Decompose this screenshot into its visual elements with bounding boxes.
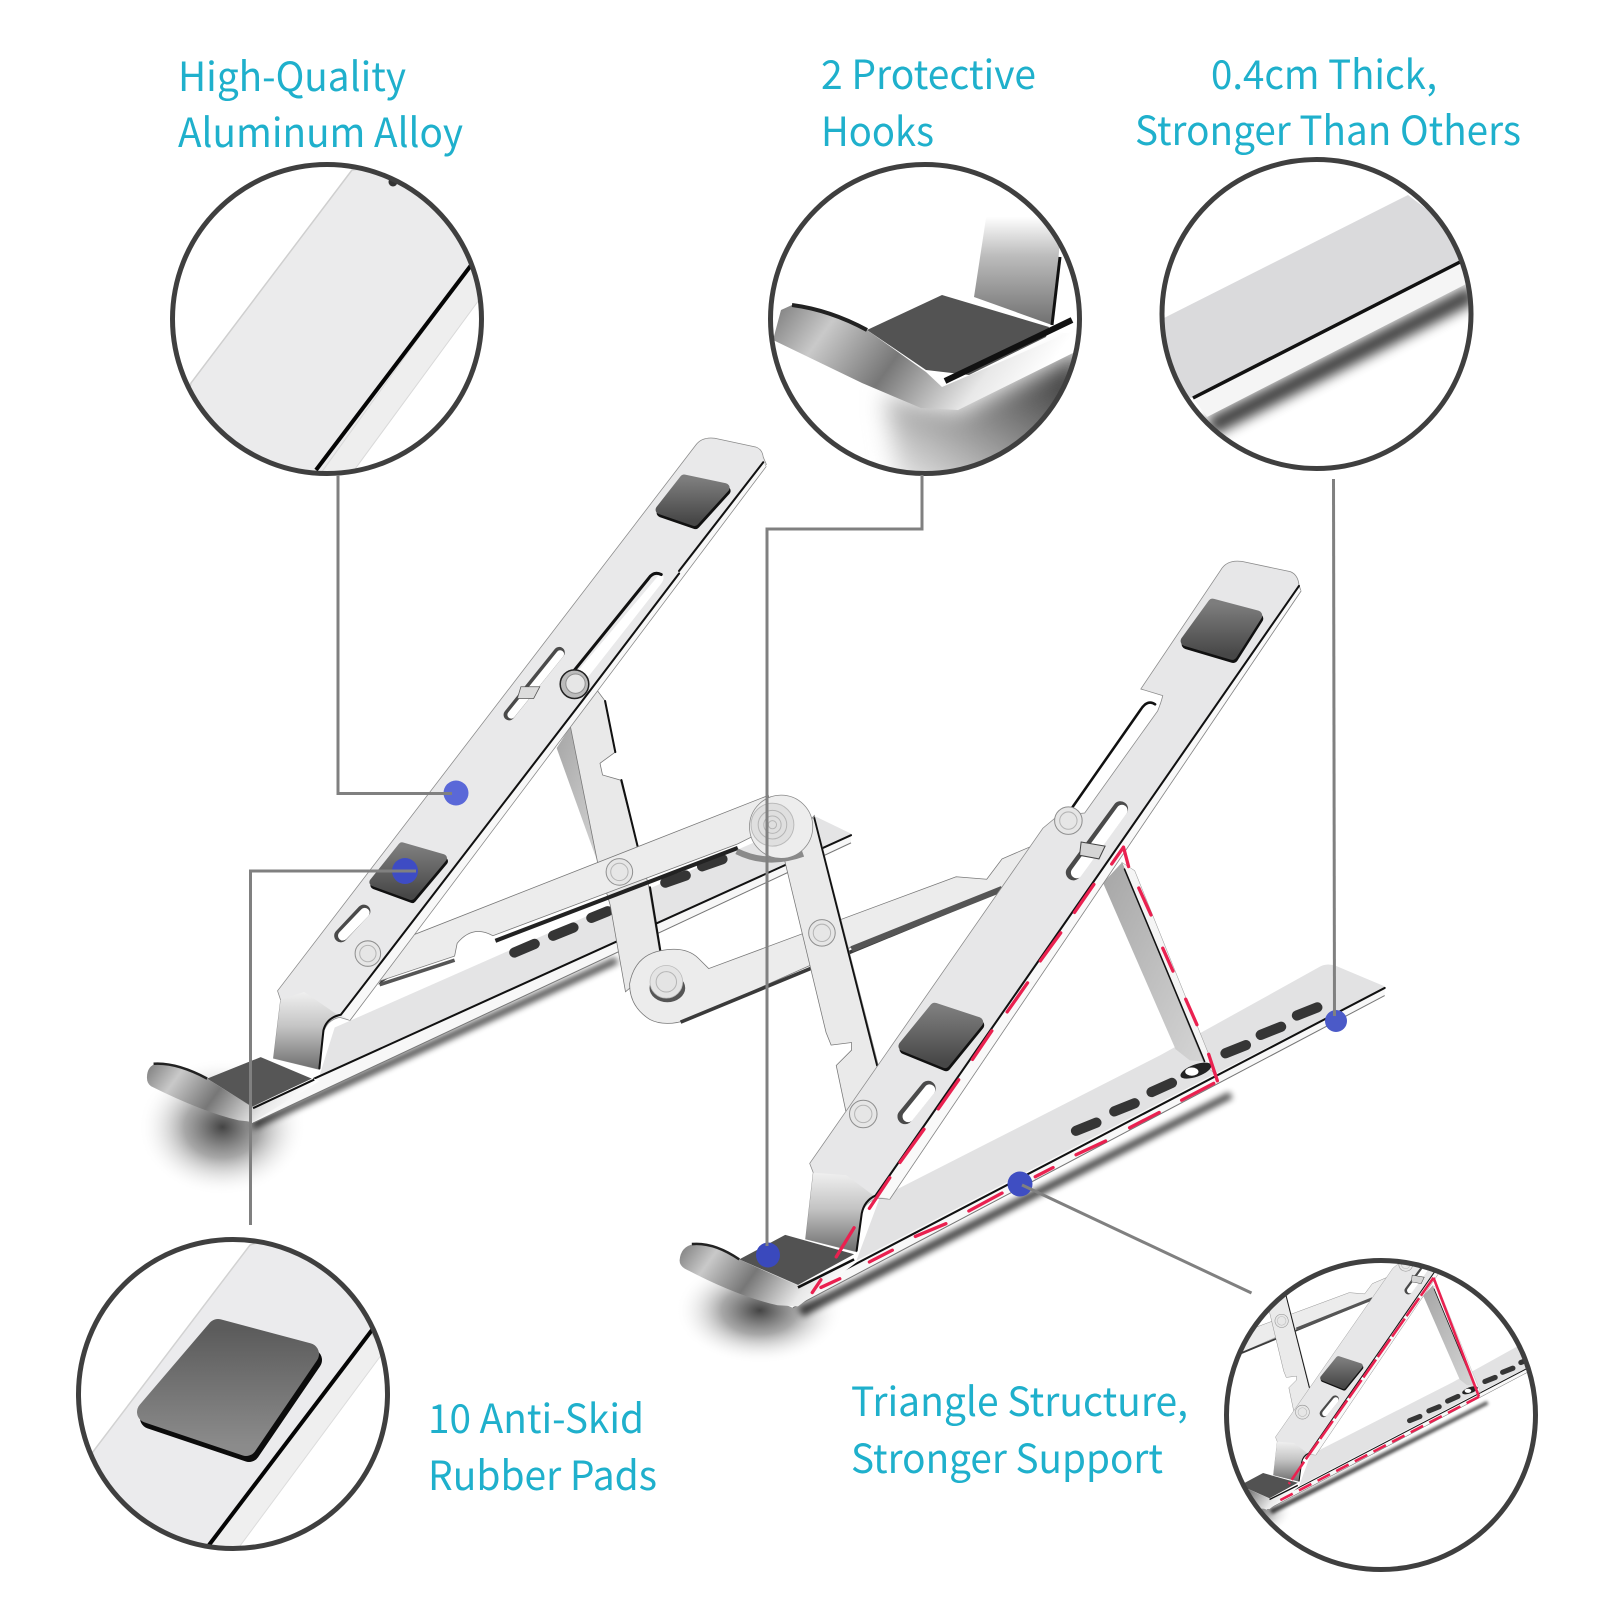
red triangle marking	[812, 847, 1217, 1293]
front arm rubber pads	[1187, 607, 1258, 658]
front top arm	[680, 561, 1301, 1306]
thick plate top	[1160, 195, 1480, 398]
heading: high-quality aluminum alloy: Aluminum Alloy	[178, 101, 463, 159]
rear base shadow	[253, 957, 618, 1130]
inset circle: aluminum alloy surface	[170, 164, 490, 480]
lower hinge bar	[630, 844, 1053, 1023]
thick plate edge	[1193, 262, 1470, 417]
heading: 2 protective hooks: 2 Protective	[821, 43, 1036, 101]
heading: anti-skid rubber pads	[428, 1387, 657, 1502]
upper scissor bar	[784, 816, 880, 1114]
scissor hinge bars linking the two units	[630, 795, 1053, 1114]
front slot edge	[1071, 703, 1155, 809]
rear base plate	[237, 816, 851, 1123]
heading: 2 protective hooks	[821, 43, 1036, 158]
rubber pad block	[151, 1336, 311, 1451]
thickness shadow	[1207, 285, 1476, 436]
heading: 2 protective hooks: Hooks	[821, 100, 934, 158]
leader line: alloy	[338, 475, 452, 794]
inset circle: rubber pad	[78, 1230, 388, 1550]
upper hinge plate	[737, 795, 813, 860]
front arm pins	[1055, 807, 1082, 834]
hook rubber pad	[867, 295, 1049, 375]
front arm holes	[1073, 809, 1120, 873]
heading: anti-skid rubber pads: Rubber Pads	[428, 1444, 657, 1502]
callout dot: rubber pad	[392, 858, 418, 884]
rear hook	[207, 1057, 312, 1107]
scissor pin	[809, 920, 835, 946]
leader line: triangle	[1022, 1185, 1252, 1293]
heading: triangle structure: Stronger Support	[851, 1427, 1163, 1485]
front base shadow	[798, 1092, 1233, 1317]
callout dot: thickness	[1325, 1010, 1347, 1032]
heading: thickness: Stronger Than Others	[1135, 99, 1521, 157]
heading: high-quality aluminum alloy	[178, 45, 463, 159]
callout dot: hook	[756, 1242, 780, 1268]
inset circle: plate thickness	[1160, 160, 1480, 468]
leader line: rubber pads	[250, 871, 416, 1225]
alloy plate	[190, 169, 469, 471]
leader line: thickness	[1334, 479, 1335, 1016]
heading: high-quality aluminum alloy: High-Quality	[178, 45, 406, 103]
rear arm holes	[509, 653, 559, 715]
mini stand	[1208, 1134, 1565, 1538]
heading: triangle structure	[851, 1370, 1188, 1485]
hook metal	[773, 305, 1075, 410]
rear hook shadow	[138, 1058, 307, 1196]
rear top arm	[147, 438, 766, 1122]
rear support leg	[557, 691, 661, 992]
leader line: hooks	[767, 475, 922, 1246]
heading: thickness	[1135, 43, 1521, 157]
front base plate	[778, 965, 1385, 1308]
rear middle bar	[378, 795, 773, 985]
mini red triangle	[1277, 1278, 1479, 1502]
mini scissor bars	[1242, 1277, 1386, 1411]
heading: thickness: 0.4cm Thick,	[1211, 43, 1437, 101]
inset circle: triangle structure	[1224, 1258, 1538, 1572]
callout dot: alloy	[444, 780, 468, 806]
laptop stand: front unit	[676, 561, 1385, 1364]
pad plate	[92, 1230, 380, 1550]
laptop stand: rear unit	[138, 438, 851, 1196]
front support strut	[1103, 862, 1217, 1082]
heading: anti-skid rubber pads: 10 Anti-Skid	[428, 1387, 644, 1445]
hook shadow	[885, 350, 1085, 490]
rear slot	[572, 573, 664, 678]
rear arm rubber pads	[661, 482, 726, 524]
front hook shadow	[676, 1257, 844, 1364]
lower hinge boss	[649, 966, 685, 1002]
callout dot: triangle	[1008, 1172, 1032, 1196]
heading: triangle structure: Triangle Structure,	[851, 1370, 1188, 1428]
front hook	[739, 1235, 854, 1285]
hook back wall	[974, 221, 1060, 324]
inset circle: protective hook	[770, 164, 1090, 490]
